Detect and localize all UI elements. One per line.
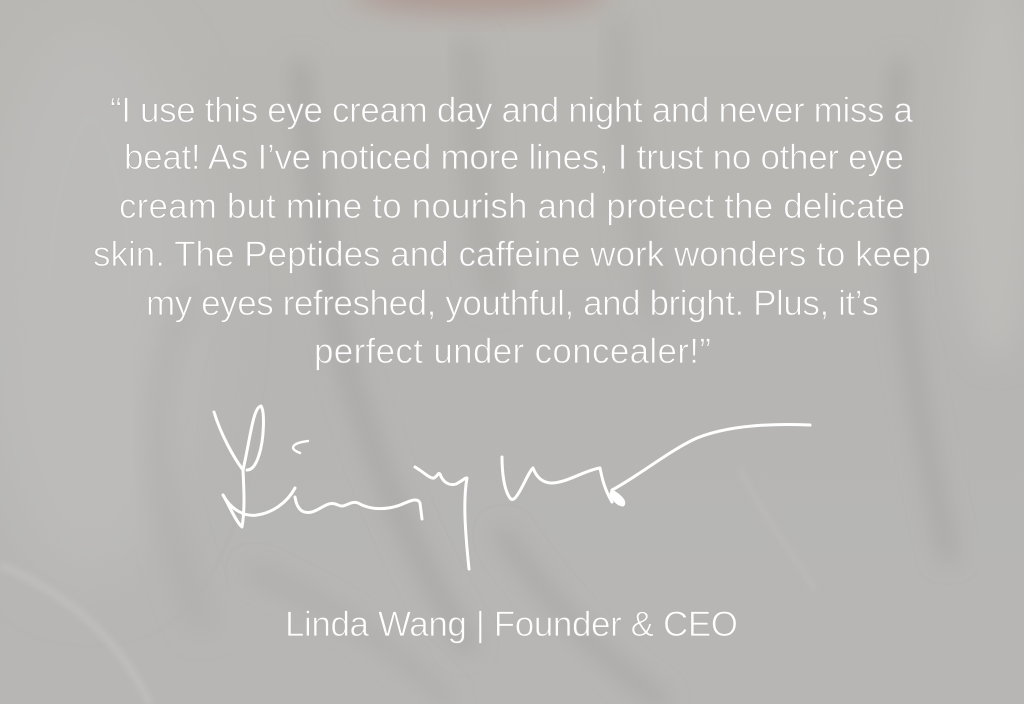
quote text: perfect under concealer!” [314, 332, 711, 371]
quote text: skin. The Peptides and caffeine work wonders to keep [93, 235, 931, 274]
quote text [93, 91, 931, 371]
attribution: Linda Wang | Founder & CEO [285, 605, 738, 644]
quote text: cream but mine to nourish and protect the delicate [119, 187, 905, 226]
quote text: my eyes refreshed, youthful, and bright. Plus, it’s [146, 284, 879, 323]
quote text: beat! As I’ve noticed more lines, I trust no other eye [124, 138, 904, 177]
quote text: “I use this eye cream day and night and never miss a [110, 91, 914, 130]
signature [214, 406, 810, 569]
